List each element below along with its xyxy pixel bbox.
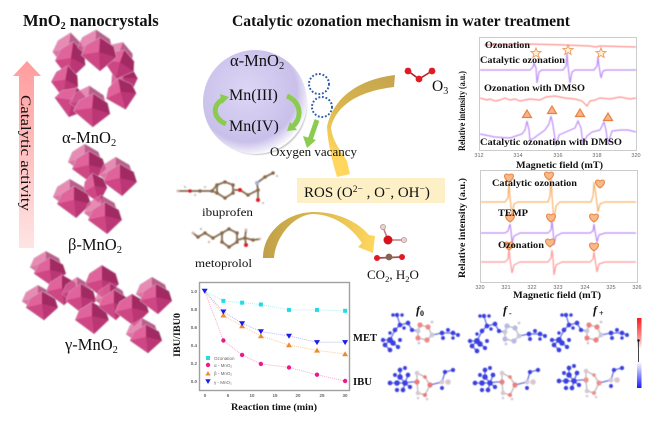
arrow: Mn(III) to Mn(IV) [287,96,299,131]
x-axis label: Magnetic field (mT) [513,290,601,301]
trace: catalytic ozonation [480,53,636,83]
legend: Ozonation [214,356,235,361]
legend: β - MnO₂ [214,371,232,376]
x-axis ticks: 10 [249,393,255,398]
map: MET f0 [381,313,460,352]
x-axis ticks: 322 [527,285,537,291]
label: CO2, H2O: CO [367,267,385,282]
label: metoprolol: metoprolol [195,256,253,270]
y-axis ticks [191,289,197,384]
chart: IBU degradation [172,282,350,413]
heading: f0: f [416,303,420,317]
map: IBU f0 [388,366,455,400]
title: Catalytic ozonation mechanism: Catalytic ozonation mechanism in water treatment [232,13,571,30]
x-axis ticks: 5 [227,393,230,398]
molecule: water [380,224,407,244]
chart: EPR TEMP spectra [457,170,642,301]
y-axis ticks: 0.0 [191,379,197,384]
title: MnO2 nanocrystals: nanocrystals [66,11,159,30]
trace labels [480,40,622,147]
x-axis ticks: 0 [204,393,207,398]
arrow: Mn(IV) to Mn(III) [215,94,229,124]
x-axis ticks: 15 [272,393,278,398]
y-axis label: Relative intensity (a.u.) [457,178,468,278]
markers: triangles [522,106,612,120]
sphere: alpha-MnO2 Mn cycle: Mn(IV) [229,118,279,135]
y-axis ticks: 0.8 [191,307,197,312]
x-axis ticks: 320 [475,285,485,291]
x-axis ticks: 326 [632,285,642,291]
box: ROS: , OH [390,185,420,201]
x-axis label: Reaction time (min) [231,402,317,413]
x-axis ticks: 25 [319,393,325,398]
heading: f0: 0 [420,309,424,318]
label: CO2, H2O: O [409,267,419,282]
legend [205,356,235,385]
heading: f minus: f [503,303,507,317]
label: CO2, H2O: , H [389,267,405,282]
x-axis ticks: 314 [513,153,523,159]
molecule: metoprolol [192,227,261,249]
trace: ozonation [481,248,636,275]
markers: stars [531,45,606,57]
y-axis label: IBU/IBU0 [172,312,182,357]
molecule: carbon dioxide [374,254,405,261]
box: ROS [297,178,445,203]
x-axis ticks [475,285,642,291]
trace: TEMP [481,220,636,245]
x-axis ticks: 316 [553,153,563,159]
trace: ozonation with DMSO [480,96,636,106]
crystal: alpha-MnO2 [49,29,142,129]
crystal: gamma-MnO2 [22,251,172,353]
sphere: alpha-MnO2 Mn cycle: 2 [279,61,284,72]
heading: f minus: - [507,309,512,318]
x-axis ticks: 321 [501,285,511,291]
x-axis ticks [474,153,641,159]
trace labels [492,178,577,250]
x-axis ticks: 30 [342,393,348,398]
series: ozonation [205,291,347,313]
x-axis ticks: 324 [580,285,590,291]
x-axis ticks: 320 [631,153,641,159]
title: MnO2 nanocrystals: MnO [23,11,61,30]
series: alpha-MnO2 [205,291,347,383]
x-axis ticks: 318 [592,153,602,159]
label: O3: O [432,78,443,95]
trace: catalytic ozonation [481,175,636,222]
label: O3: 3 [443,86,448,97]
trace labels: Ozonation [485,40,530,50]
arrow: ROS to products [263,212,375,258]
label: catalytic activity: Catalytic activity [17,95,33,212]
legend: γ - MnO₂ [214,380,232,385]
box: ROS: ROS (O [304,185,353,201]
trace labels: Ozonation with DMSO [484,83,585,93]
box: ROS: , O [363,185,385,201]
y-axis ticks: 1.0 [191,289,197,294]
trace labels: TEMP [498,208,529,218]
trace labels: Catalytic ozonation [480,55,565,65]
label: alpha-MnO2: α-MnO [62,128,111,147]
icon: oxygen vacancy circles [309,74,332,117]
box: ROS: − [385,185,390,195]
y-axis ticks: 0.2 [191,361,197,366]
chart: EPR DMSO spectra [457,38,641,171]
trace labels: Catalytic ozonation with DMSO [480,137,622,147]
series: gamma-MnO2 [202,289,348,345]
map: MET f minus [468,314,547,353]
label: gamma-MnO2: 2 [113,345,118,356]
sphere: alpha-MnO2 Mn cycle [203,50,307,155]
map: IBU f minus [473,366,540,400]
x-axis ticks: 312 [474,153,484,159]
label: oxygen vacancy: Oxygen vacancy [270,144,357,159]
trace: catalytic ozonation with DMSO [480,116,636,146]
arrow: catalytic activity [13,61,41,248]
x-axis label: Magnetic field (mT) [516,160,603,171]
x-axis ticks: 325 [606,285,616,291]
heading: f plus: f [593,303,597,317]
trace: ozonation [484,44,636,47]
label: alpha-MnO2: 2 [111,138,116,149]
label: beta-MnO2: β-MnO [68,235,117,254]
label: ibuprofen: ibuprofen [202,205,253,219]
markers: hearts [505,172,604,251]
molecule: ibuprofen [176,171,278,204]
sphere: alpha-MnO2 Mn cycle: Mn(III) [229,87,278,104]
label: CO2, H2O: 2 [405,274,409,284]
map: IBU f plus [557,364,624,398]
arrow: to oxygen vacancy [303,120,317,148]
sphere: alpha-MnO2 Mn cycle: α-MnO [230,51,279,70]
box: ROS: − [420,185,425,195]
label: gamma-MnO2: γ-MnO [65,335,113,354]
x-axis ticks: 20 [295,393,301,398]
label: IBU: IBU [353,376,372,388]
arrow: ozone to ROS [327,75,395,177]
trace labels: Catalytic ozonation [492,178,577,188]
label: MET: MET [353,332,378,344]
crystal: beta-MnO2 [53,144,137,234]
heading: f plus: + [597,309,604,318]
label: beta-MnO2: 2 [117,245,122,256]
title: MnO2 nanocrystals: 2 [61,21,66,32]
series: beta-MnO2 [205,291,348,356]
box: ROS: 2− [353,185,363,195]
map: MET f plus [550,313,629,352]
y-axis ticks: 0.6 [191,325,197,330]
legend: α - MnO₂ [214,363,232,368]
x-axis ticks: 323 [553,285,563,291]
y-axis label: Relative intensity (a.u.) [457,71,467,151]
molecule: ozone [405,68,435,82]
box: ROS: ) [425,185,430,201]
x-axis ticks [204,393,348,398]
trace labels: Ozonation [498,240,544,250]
y-axis ticks: 0.4 [191,343,197,348]
colour scale bar [637,318,642,388]
label: CO2, H2O: 2 [385,274,389,284]
